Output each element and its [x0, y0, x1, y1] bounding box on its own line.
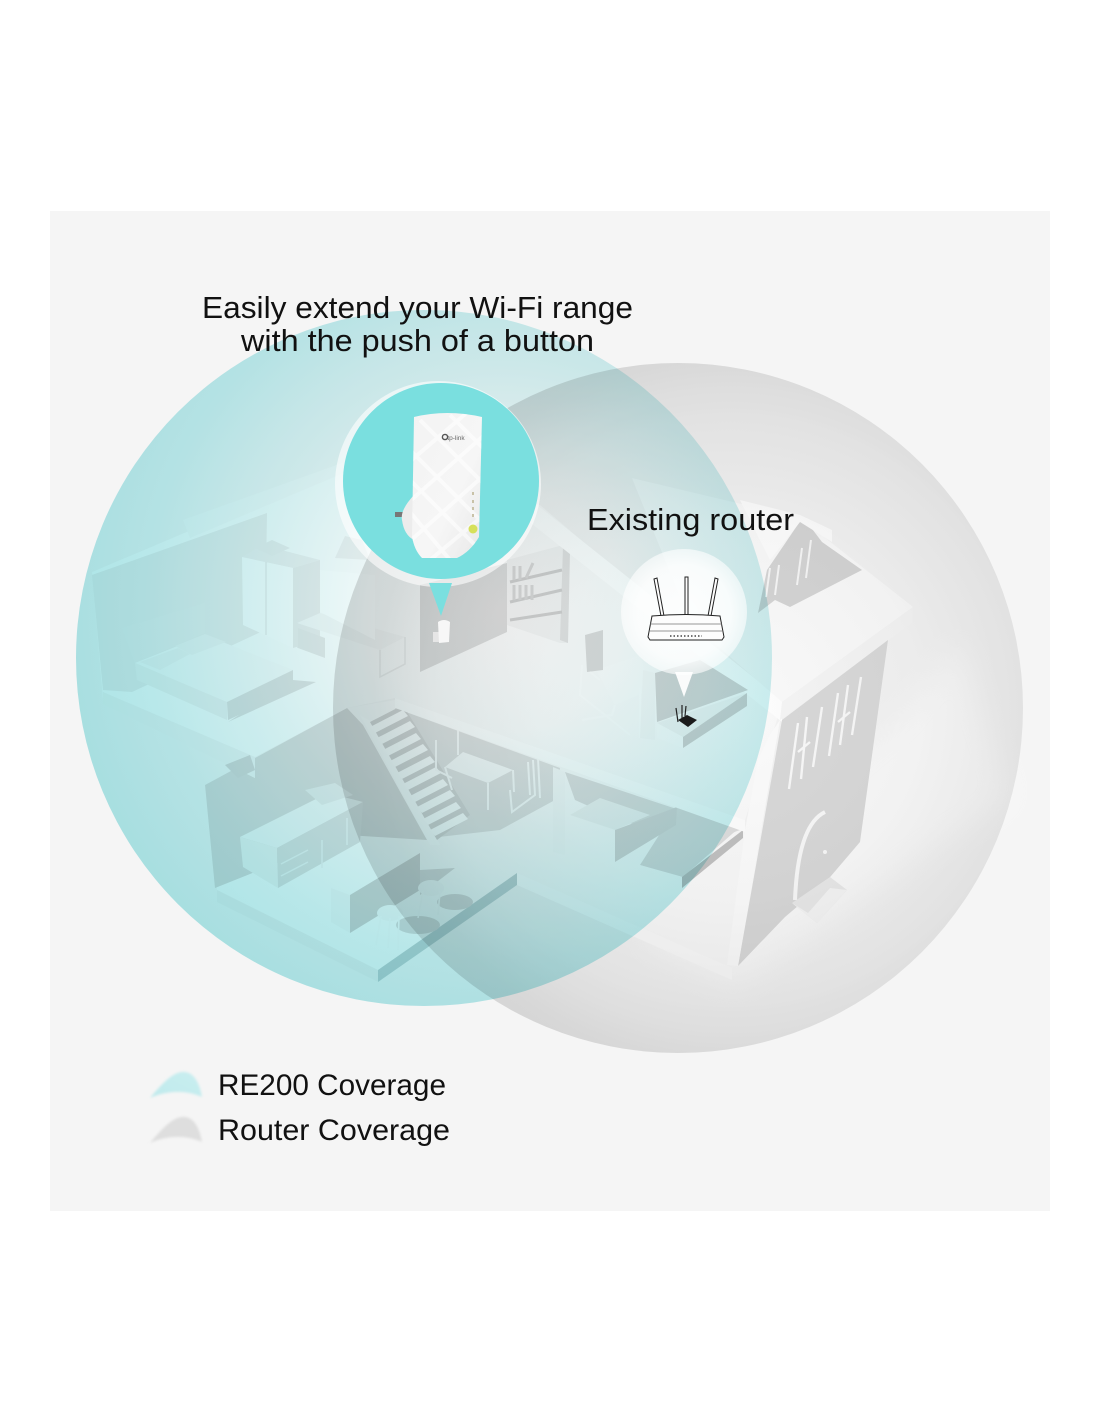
desk and chair	[580, 630, 650, 738]
callout halo	[335, 381, 541, 587]
extender device icon: tp-link	[447, 435, 465, 442]
study desk	[297, 536, 405, 677]
callout circle	[343, 383, 539, 579]
extender callout	[335, 381, 541, 643]
front door	[792, 812, 847, 923]
roof diagonal beam	[527, 505, 782, 722]
legend label: RE200: RE200 Coverage	[218, 1069, 446, 1102]
bedroom wall	[92, 513, 267, 692]
upper floor plate	[92, 465, 780, 820]
legend icon: RE200	[150, 1072, 202, 1098]
heading	[202, 290, 633, 358]
small black router	[676, 705, 697, 727]
router shelf and wall	[640, 660, 748, 748]
router coverage circle	[333, 363, 1023, 1053]
legend icon: router	[150, 1117, 202, 1143]
roof	[632, 478, 913, 702]
wardrobe	[242, 540, 320, 648]
front wall	[738, 640, 888, 966]
central wall	[420, 563, 507, 672]
bookcase	[507, 545, 570, 643]
staircase	[360, 705, 470, 845]
kitchen wall	[205, 708, 427, 888]
front windows	[789, 677, 861, 789]
router bubble	[621, 549, 747, 675]
ground floor plate	[205, 700, 745, 972]
legend	[150, 1069, 450, 1147]
lower room sofa	[553, 767, 743, 888]
panel background	[50, 211, 1050, 1211]
kitchen counter	[240, 783, 363, 888]
heading: Easily extend your Wi-Fi range	[202, 290, 633, 325]
infographic	[50, 211, 1050, 1211]
extender device icon	[395, 413, 482, 558]
dining table and chairs	[436, 730, 540, 812]
kitchen island with stools	[331, 853, 473, 950]
ground floor back wall	[395, 708, 560, 838]
existing router label: Existing router	[587, 502, 794, 537]
callout pointer	[429, 583, 452, 616]
bed	[122, 603, 316, 722]
extender on wall	[433, 620, 450, 643]
router line icon	[648, 577, 724, 640]
router pointer	[675, 672, 693, 697]
ground light around house	[640, 640, 1010, 990]
heading: with the push of a button	[240, 323, 594, 358]
dormer	[740, 500, 862, 613]
legend label: router: Router Coverage	[218, 1114, 450, 1147]
house cutaway illustration	[92, 462, 913, 982]
router callout	[621, 549, 747, 727]
RE200 coverage circle	[76, 310, 772, 1006]
